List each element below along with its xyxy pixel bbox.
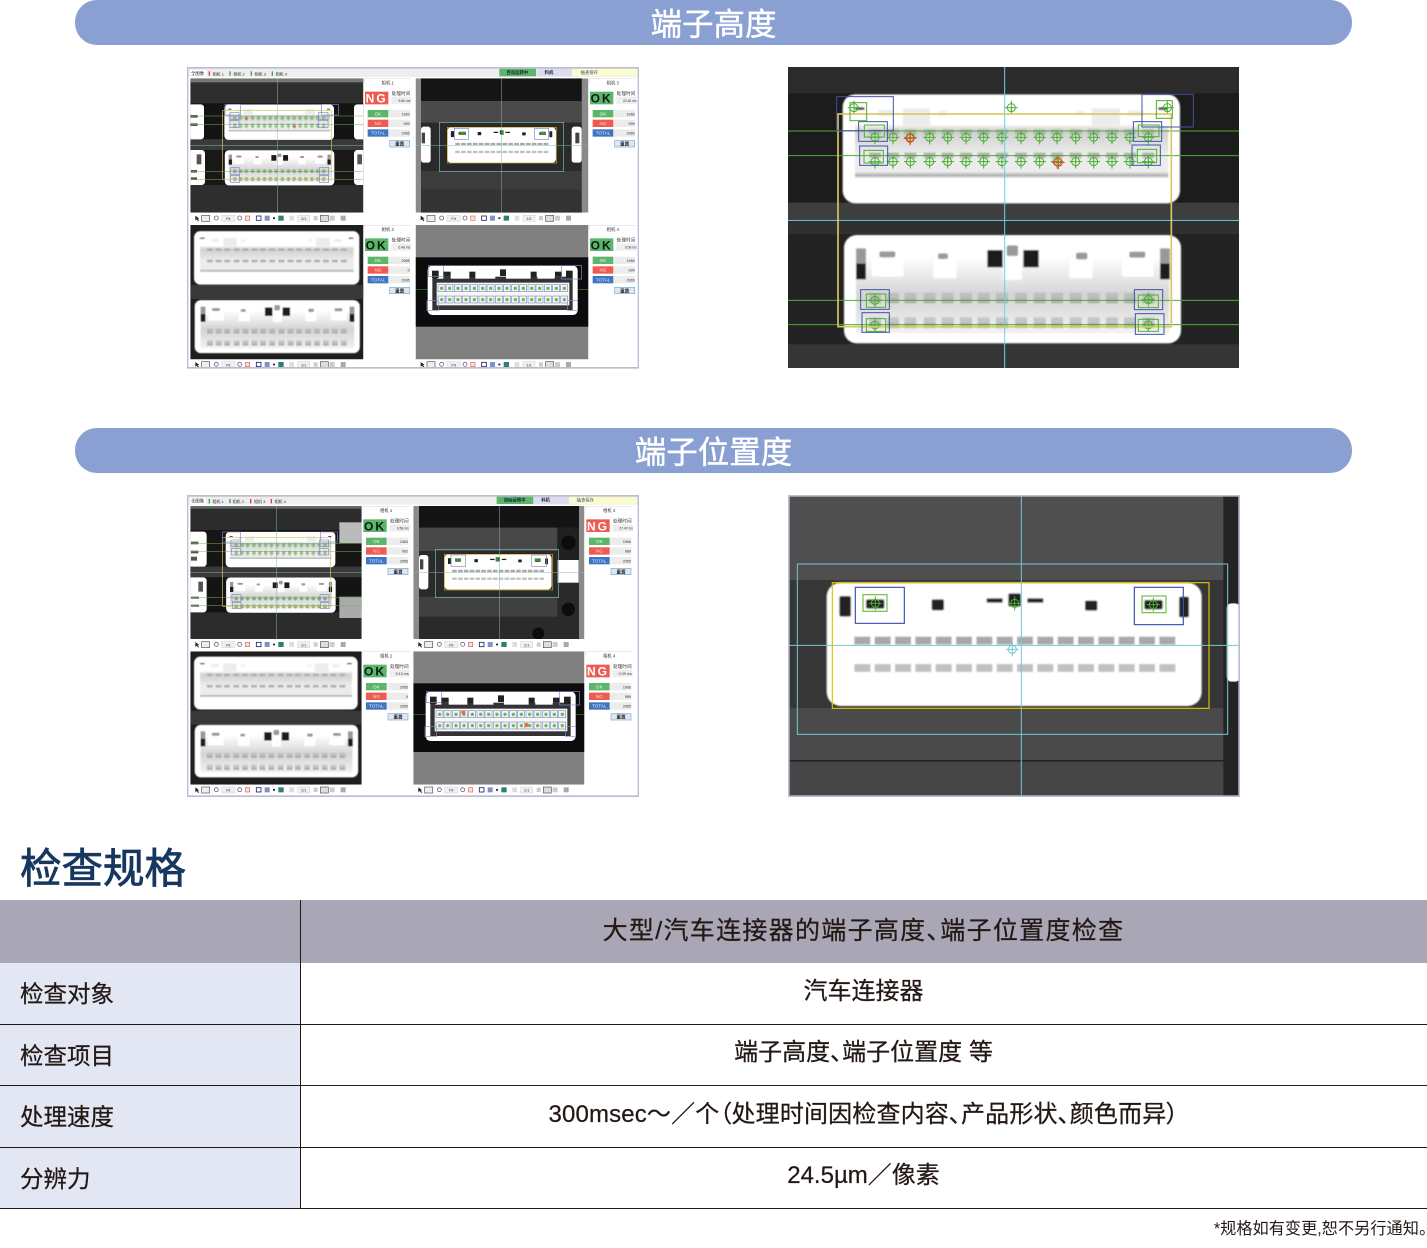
target markers [869, 596, 1160, 656]
camera 1 result panel: 2965 [402, 132, 410, 136]
camera 3 result panel: 相机 3 [607, 79, 620, 86]
tab bar: 全图像 [191, 498, 205, 505]
camera 4 result panel [586, 651, 633, 766]
camera 2 result panel: OK [364, 665, 386, 679]
camera 1 result panel: 9.60 ms [398, 99, 411, 103]
tab bar [188, 69, 638, 77]
camera 2 result panel: 相机 2 [382, 226, 395, 233]
camera 3 result panel: 24.40 ms [623, 99, 637, 103]
camera 2 result panel: 2965 [402, 278, 410, 282]
camera 4 result panel: 0.08 ms [625, 246, 637, 250]
camera 4 view [416, 225, 588, 360]
camera 3 result panel: 2955 [623, 559, 631, 563]
camera 1 result panel: NG [366, 92, 388, 106]
camera 1 result panel: OK [364, 519, 386, 533]
tab bar: 抽查保存 [581, 69, 599, 76]
row value: object: 汽车连接器 [804, 978, 924, 1005]
connector face [827, 583, 1202, 706]
camera 3 toolbar [421, 215, 571, 221]
tab bar: 抽查保存 [577, 497, 595, 504]
camera 1 result panel [365, 78, 411, 193]
tab bar: 自动运转中 [507, 69, 528, 76]
screenshot: terminal height inspection software [187, 67, 639, 369]
tab bar [188, 496, 638, 505]
tab bar: 相机 3 [255, 70, 267, 76]
camera 3 view [413, 506, 584, 639]
row label: speed: 处理速度 [20, 1104, 114, 1130]
specification table [0, 900, 1427, 1209]
camera 4 result panel: 2965 [627, 278, 635, 282]
photo: terminal height close-up with inspection overlays [788, 67, 1239, 368]
camera 1 result panel: 1963 [400, 540, 408, 544]
camera 2 view [190, 225, 364, 360]
camera 2 result panel [365, 225, 411, 340]
measurement lines [788, 67, 1239, 368]
yellow region box [832, 583, 1209, 708]
camera 4 result panel: 0.09 ms [619, 672, 632, 676]
tab bar: 料机 [545, 69, 554, 76]
camera 1 result panel: 992 [402, 550, 408, 554]
camera 4 toolbar [418, 787, 569, 793]
tab bar: 相机 1 [213, 70, 225, 76]
camera 2 toolbar [195, 787, 346, 793]
connector: upper [843, 94, 1180, 203]
camera 1 result panel: 9.58 ms [397, 527, 409, 531]
tab bar: 全图像 [191, 70, 205, 77]
yellow region box [838, 114, 1171, 327]
camera 3 toolbar [418, 642, 569, 648]
tab bar: 相机 2 [233, 70, 245, 76]
row label: items: 检查项目 [20, 1043, 114, 1069]
camera 2 view [190, 651, 362, 785]
tab bar: 相机 1 [212, 498, 224, 504]
tab bar: 相机 2 [233, 498, 245, 504]
camera 4 result panel: 2955 [623, 705, 631, 709]
camera 2 result panel: OK [366, 238, 388, 252]
heading: terminal position: 端子位置度 [635, 434, 792, 470]
row value: items: 端子高度、端子位置度 等 [734, 1039, 993, 1066]
camera 2 result panel: 0 [406, 695, 408, 699]
camera 3 result panel: 相机 3 [603, 507, 616, 514]
cyan alignment lines and region [788, 495, 1240, 797]
camera 2 result panel: 相机 2 [380, 652, 393, 659]
row value: speed: 300msec～／个（处理时间因检查内容、产品形状、颜色而异） [548, 1101, 1179, 1128]
footnote: *规格如有变更,恕不另行通知。 [1214, 1220, 1427, 1238]
tab bar: 相机 4 [275, 498, 287, 504]
heading: terminal position [75, 428, 1352, 473]
camera 4 result panel [590, 225, 637, 340]
camera 1 result panel: 1963 [402, 112, 410, 116]
camera 4 toolbar [421, 362, 571, 368]
camera 3 result panel: 1966 [627, 112, 635, 116]
camera 3 result panel [590, 78, 637, 193]
camera 2 toolbar [195, 362, 346, 368]
row label: object: 检查对象 [20, 981, 114, 1007]
camera 2 result panel: 2965 [402, 259, 410, 263]
camera 3 view [416, 78, 588, 213]
camera 2 result panel: 6.48 ms [398, 246, 411, 250]
camera 1 view [190, 78, 364, 213]
detection boxes [837, 94, 1193, 334]
label column [0, 963, 300, 1208]
camera 3 result panel: 1966 [623, 540, 631, 544]
photo: terminal position close-up with inspection overlays [788, 495, 1240, 797]
row label: resolution: 分辨力 [20, 1166, 90, 1192]
camera 2 result panel [363, 651, 410, 766]
camera 4 view [413, 651, 584, 785]
camera 3 result panel [586, 506, 633, 621]
header text: 大型/汽车连接器的端子高度、端子位置度检查 [603, 917, 1124, 945]
camera 4 result panel: 相机 4 [603, 652, 616, 659]
camera 4 result panel: NG [587, 665, 609, 679]
camera 4 result panel: 989 [625, 695, 631, 699]
camera 3 result panel: OK [591, 92, 613, 106]
camera 2 result panel: 2955 [400, 685, 408, 689]
camera 4 result panel: 1966 [627, 259, 635, 263]
screenshot: terminal position inspection software [187, 495, 639, 797]
camera 4 result panel: 999 [629, 269, 635, 273]
camera 2 result panel: 2955 [400, 705, 408, 709]
camera 4 result panel: 1966 [623, 685, 631, 689]
section title: 检查规格 [20, 845, 186, 892]
tab bar: 相机 3 [254, 498, 266, 504]
camera 2 result panel: 9.13 ms [396, 672, 409, 676]
connector: lower [844, 235, 1181, 343]
table header row [0, 900, 1427, 963]
camera 1 toolbar [195, 215, 346, 221]
camera 4 result panel: OK [591, 238, 613, 252]
heading: terminal height: 端子高度 [650, 6, 776, 42]
camera 3 result panel: 27.47 ms [619, 527, 633, 531]
camera 4 result panel: 相机 4 [607, 226, 620, 233]
camera 2 result panel: 0 [408, 269, 410, 273]
terminal markers [848, 101, 1174, 332]
tab bar: 自动运转中 [504, 497, 525, 504]
camera 3 result panel: NG [587, 519, 609, 533]
camera 1 result panel: 相机 1 [380, 507, 393, 514]
camera 1 result panel: 相机 1 [382, 79, 395, 86]
camera 1 toolbar [195, 642, 346, 648]
camera 1 view [190, 506, 362, 639]
camera 3 result panel: 999 [629, 122, 635, 126]
camera 1 result panel: 999 [404, 122, 410, 126]
camera 1 result panel: 2955 [400, 559, 408, 563]
row value: resolution: 24.5µm／像素 [787, 1162, 940, 1189]
tab bar: 相机 4 [276, 70, 288, 76]
heading: terminal height [75, 0, 1352, 45]
camera 3 result panel: 989 [625, 550, 631, 554]
camera 3 result panel: 2965 [627, 132, 635, 136]
tab bar: 料机 [541, 497, 551, 504]
detection boxes [855, 587, 1183, 625]
camera 1 result panel [363, 506, 410, 621]
